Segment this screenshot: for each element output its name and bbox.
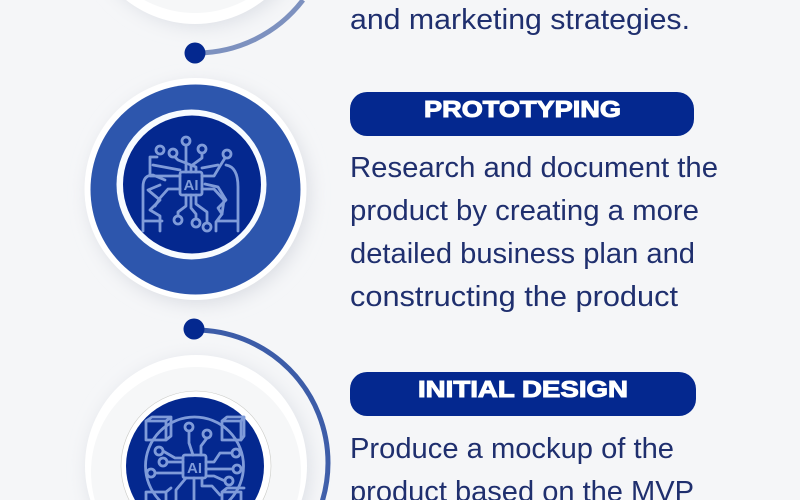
prototyping description: product by creating a more xyxy=(350,195,699,227)
icon label: AI: AI xyxy=(184,177,198,194)
connector arc from step 1 xyxy=(184,0,303,64)
prototyping heading pill: PROTOTYPING xyxy=(424,96,621,122)
icon label: AI: AI xyxy=(187,460,202,477)
step 1 circle (cropped at top) xyxy=(84,0,311,27)
connector arc to step 3 xyxy=(184,318,328,500)
prototyping description: detailed business plan and xyxy=(350,238,695,270)
icon: AI chip with network and cubes xyxy=(146,417,244,500)
step 2 circle icon: prototyping xyxy=(84,78,309,304)
prototyping heading pill xyxy=(350,92,694,136)
step 3 circle icon: initial design xyxy=(85,355,310,500)
icon: hands holding AI chip xyxy=(143,137,238,231)
prototyping description: constructing the product xyxy=(350,281,678,313)
initial design description: Produce a mockup of the xyxy=(350,433,674,465)
initial design heading pill: INITIAL DESIGN xyxy=(418,376,628,402)
initial design description xyxy=(350,433,694,500)
step 1 description end: and marketing strategies. xyxy=(350,4,690,36)
prototyping description: Research and document the xyxy=(350,152,718,184)
initial design heading pill xyxy=(350,372,696,416)
prototyping description xyxy=(350,152,718,313)
